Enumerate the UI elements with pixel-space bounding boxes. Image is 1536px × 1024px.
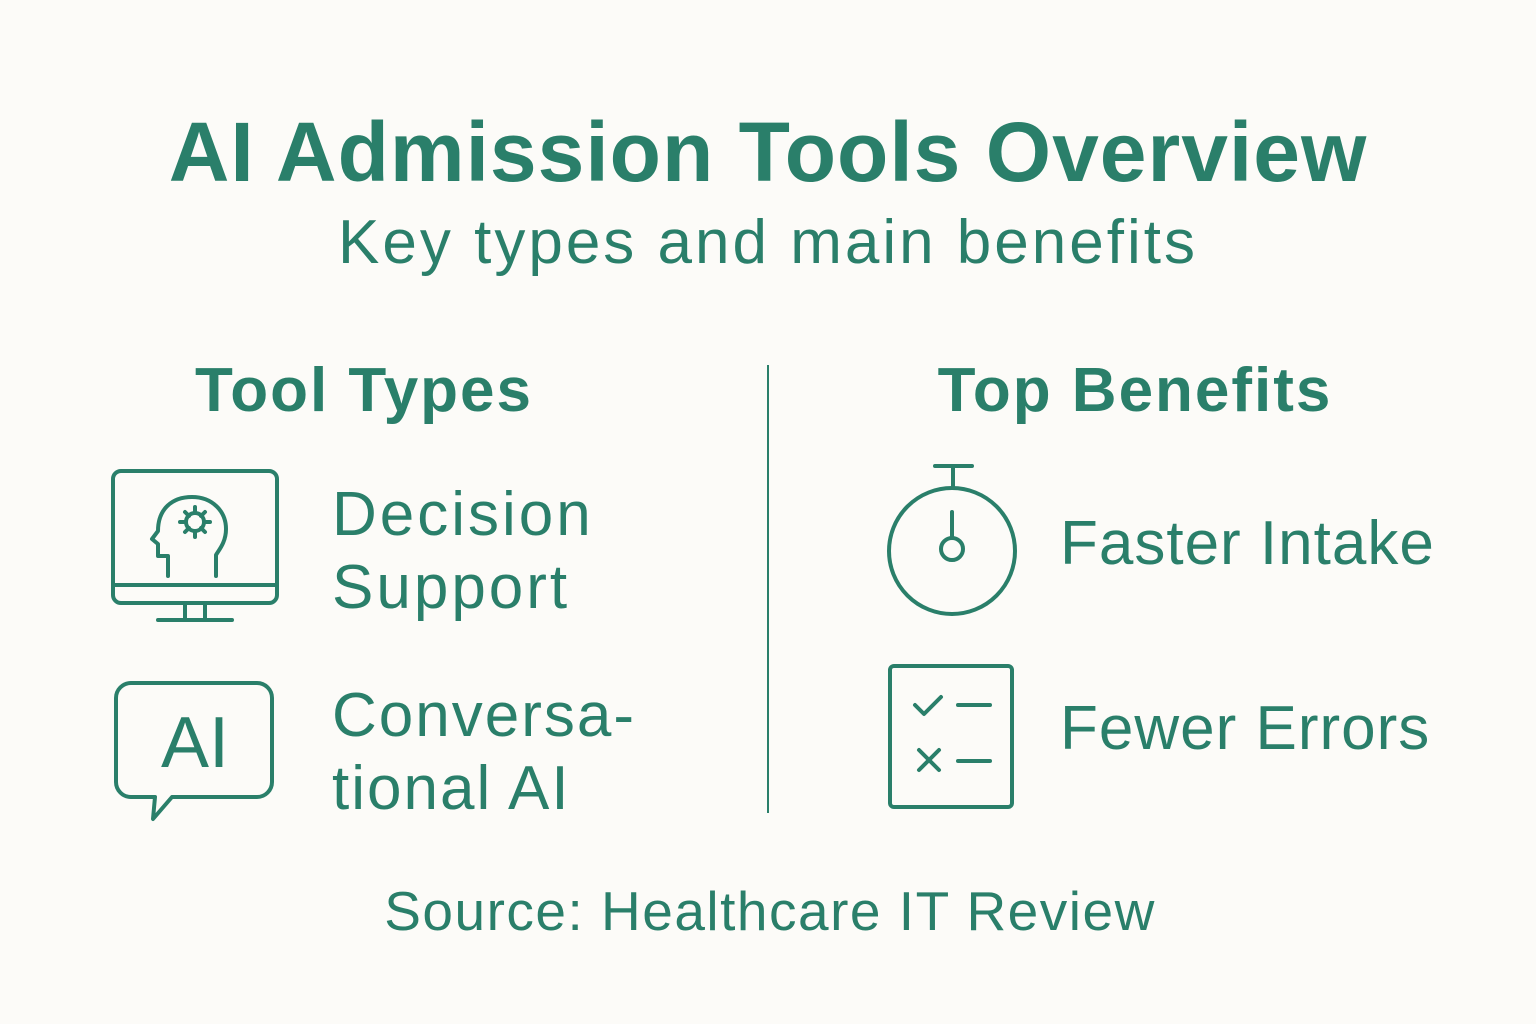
icon: checklist <box>888 664 1014 809</box>
source: Source: Healthcare IT Review <box>384 880 1156 942</box>
text: decision support: Support <box>332 553 570 622</box>
icon: AI speech bubble <box>114 681 274 822</box>
text: decision support <box>332 480 594 622</box>
heading: top benefits: Top Benefits <box>938 356 1332 425</box>
subtitle: Key types and main benefits <box>338 208 1198 277</box>
text: conversational AI: Conversa- <box>332 681 636 750</box>
title: AI Admission Tools Overview <box>169 105 1367 199</box>
text: conversational AI: tional AI <box>332 754 571 823</box>
icon: stopwatch <box>887 464 1017 616</box>
text: faster intake: Faster Intake <box>1060 509 1435 578</box>
text: conversational AI <box>332 681 636 823</box>
icon: monitor with head <box>111 469 279 622</box>
heading: tool types: Tool Types <box>195 356 533 425</box>
icon: AI speech bubble: AI <box>161 703 229 783</box>
text: decision support: Decision <box>332 480 594 549</box>
divider <box>767 365 769 813</box>
text: fewer errors: Fewer Errors <box>1060 694 1430 763</box>
